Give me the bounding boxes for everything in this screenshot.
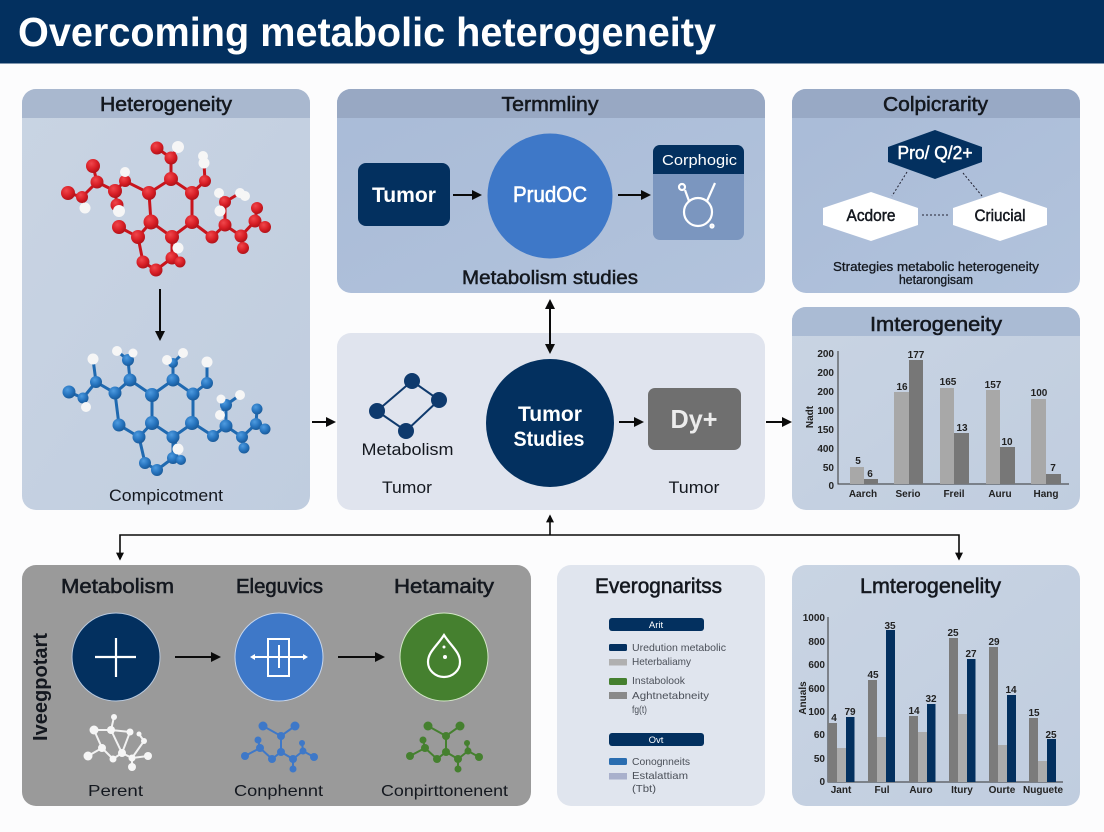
icon: navy circle — [72, 613, 160, 701]
heading: Termmliny — [502, 94, 598, 116]
icon: blue circle — [235, 613, 323, 701]
legend group 1: Arit — [649, 620, 663, 631]
legend group 1: fg(t) — [632, 704, 647, 716]
bar chart: Nuguete — [1023, 785, 1063, 796]
bar chart: 100 — [1031, 388, 1048, 399]
bar chart: Auro — [909, 785, 933, 796]
icon: blue molecule — [62, 346, 270, 476]
heading: Everognaritss — [595, 575, 722, 598]
hexagon: Crucial — [953, 192, 1047, 241]
heading: Hetamaity — [394, 576, 494, 598]
bar chart: 100 — [808, 707, 825, 718]
card: Corphogic: Corphogic — [662, 152, 738, 169]
label: Conphennt — [234, 783, 324, 800]
panel: heterogeneity molecules — [22, 89, 310, 510]
arrow: red to blue molecule — [159, 289, 161, 339]
heading: Lmterogenelity — [860, 575, 1002, 598]
bar chart: 5 — [855, 456, 861, 467]
box: Dy+ — [648, 388, 741, 450]
label: Conpirttonenent — [381, 783, 509, 800]
arrow — [338, 656, 383, 658]
label: Tumor — [668, 478, 720, 497]
panel: complexity hexagons — [792, 89, 1080, 293]
legend group 1: Uredution metabolic — [632, 642, 726, 654]
bar chart: Ful — [874, 785, 890, 796]
hexagon: Acdore — [823, 192, 918, 241]
bar chart: Itury — [951, 785, 973, 796]
icon: red molecule — [61, 141, 271, 276]
bar chart: Auru — [988, 489, 1012, 500]
icon: ring with arms — [679, 183, 715, 228]
bar chart: Hang — [1034, 489, 1058, 500]
panel: upper bar chart — [792, 307, 1080, 510]
icon: metabolism network — [369, 373, 447, 439]
panel: tumor studies — [337, 333, 765, 510]
bar chart: 10 — [1001, 437, 1013, 448]
bar chart: 400 — [817, 444, 834, 455]
title: Overcoming metabolic heterogeneity — [18, 9, 716, 55]
legend group 2: Ovt — [649, 735, 664, 746]
heading: Heterogeneity — [100, 94, 232, 116]
legend group 2 — [609, 733, 704, 795]
bar chart: 200 — [817, 349, 834, 360]
bar chart: 29 — [988, 637, 1000, 648]
caption: Strategies metabolic heterogeneity — [833, 260, 1040, 274]
heading: Imterogeneity — [870, 314, 1002, 336]
arrow: tumor panel to chart — [766, 421, 790, 423]
caption — [833, 260, 1040, 287]
bar chart: 200 — [817, 368, 834, 379]
arrow: left panel to tumor panel — [312, 421, 334, 423]
bar chart: 157 — [985, 380, 1002, 391]
circle: Tumor Studies: Tumor — [518, 403, 582, 426]
bar chart: 25 — [947, 628, 959, 639]
bar chart: 165 — [940, 377, 957, 388]
tumor box — [358, 163, 450, 226]
bar chart: 177 — [908, 350, 925, 361]
bar chart: Serio — [895, 489, 921, 500]
bar chart — [798, 613, 1063, 796]
panel: metabolism pathway — [22, 565, 531, 806]
bar chart: Nadt — [805, 405, 816, 428]
heading: Eleguvics — [236, 576, 323, 598]
bar chart: 15 — [1028, 708, 1040, 719]
legend group 2: Conognneits — [632, 756, 690, 768]
bar chart: 25 — [1045, 730, 1057, 741]
bar chart: 32 — [925, 694, 937, 705]
bar chart: Anuals — [798, 681, 809, 715]
circle: Tumor Studies — [486, 359, 614, 487]
legend group 1: Instabolook — [632, 675, 686, 687]
caption: Compicotment — [109, 486, 223, 505]
bar chart: 50 — [823, 463, 834, 474]
arrow — [175, 656, 219, 658]
title bar — [0, 0, 1104, 64]
bar chart: 800 — [808, 637, 825, 648]
box: Dy+: Dy+ — [670, 404, 718, 434]
bar chart: 60 — [814, 730, 825, 741]
card: Corphogic — [653, 145, 744, 240]
bar chart: 14 — [908, 706, 920, 717]
bar chart: 150 — [817, 425, 834, 436]
panel header — [337, 89, 765, 118]
bar chart: Aarch — [849, 489, 877, 500]
bar chart: 13 — [956, 423, 968, 434]
bar chart: 600 — [808, 660, 825, 671]
side label: Iveegpotart — [30, 633, 52, 741]
caption: hetarongisam — [899, 273, 973, 287]
legend group 2: (Tbt) — [632, 783, 656, 795]
hexagon: Crucial: Criucial — [974, 206, 1026, 225]
panel: lower bar chart — [792, 565, 1080, 806]
legend group 1: Aghtnetabneity — [632, 690, 710, 702]
dotted connectors — [892, 172, 982, 215]
label: Metabolism — [362, 440, 454, 459]
icon: white molecule — [84, 714, 152, 771]
label: Tumor — [382, 478, 432, 497]
bar chart: 600 — [808, 684, 825, 695]
double arrow between panels — [549, 301, 551, 352]
connector bracket — [120, 516, 959, 559]
panel header — [792, 307, 1080, 336]
bar chart: 16 — [896, 382, 908, 393]
legend group 2: Estalattiam — [632, 770, 688, 782]
heading: Colpicrarity — [883, 94, 988, 116]
tumor box: Tumor — [372, 184, 436, 207]
bar chart: 4 — [831, 713, 837, 724]
icon: green small molecule — [406, 722, 483, 772]
bar chart: 200 — [817, 387, 834, 398]
panel header — [792, 89, 1080, 118]
arrow — [618, 194, 649, 196]
legend group 1 — [609, 618, 726, 716]
caption: Metabolism studies — [462, 268, 638, 289]
circle: Tumor Studies: Studies — [514, 428, 584, 451]
bar chart: Ourte — [989, 785, 1016, 796]
circle: PrudOC: PrudOC — [513, 182, 587, 207]
panel header — [22, 89, 310, 118]
panel: legend — [557, 565, 765, 806]
heading: Metabolism — [61, 576, 174, 598]
bar chart — [805, 349, 1069, 500]
bar chart: Jant — [831, 785, 852, 796]
bar chart: 0 — [828, 481, 834, 492]
legend group 1: Heterbaliamy — [632, 656, 692, 668]
bar chart: 79 — [844, 707, 856, 718]
label: Perent — [88, 783, 144, 800]
bar chart: 14 — [1005, 685, 1017, 696]
icon: blue small molecule — [241, 722, 318, 772]
panel: termmliny flow — [337, 89, 765, 293]
bar chart: 7 — [1050, 463, 1056, 474]
arrow — [619, 421, 642, 423]
bar chart: 100 — [817, 406, 834, 417]
hexagon: Pro/ Q/2+ — [888, 130, 982, 179]
bar chart: 6 — [867, 469, 873, 480]
bar chart: 0 — [819, 777, 825, 788]
bar chart: 45 — [867, 670, 879, 681]
hexagon: Acdore: Acdore — [846, 206, 896, 225]
bar chart: Freil — [943, 489, 965, 500]
bar chart: 50 — [814, 754, 825, 765]
arrow — [453, 194, 480, 196]
circle: PrudOC — [488, 134, 612, 258]
bar chart: 27 — [965, 649, 977, 660]
bar chart: 35 — [884, 621, 896, 632]
hexagon: Pro/ Q/2+: Pro/ Q/2+ — [898, 143, 972, 163]
icon: green circle with drop — [400, 613, 488, 701]
bar chart: 1000 — [803, 613, 825, 624]
